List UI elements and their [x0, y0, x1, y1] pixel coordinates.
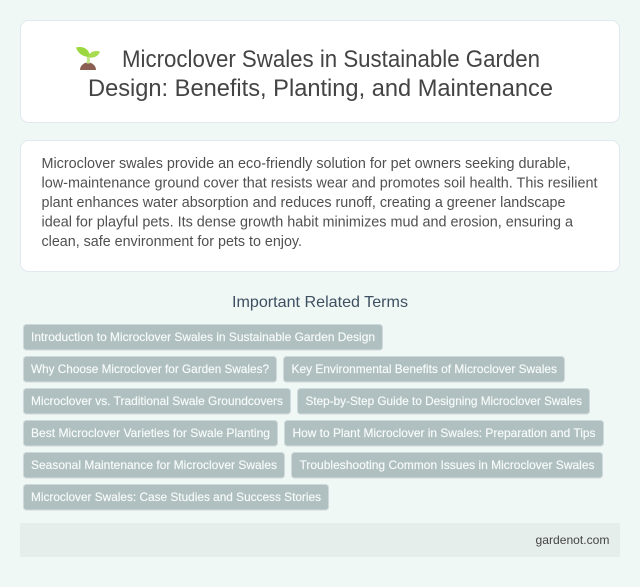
- tag 9: Troubleshooting Common Issues in Microclover Swales: [300, 458, 594, 472]
- footer bar: [20, 523, 620, 557]
- tag 1: [24, 324, 382, 350]
- description text: clean, safe environment for pets to enjoy.: [42, 234, 302, 250]
- tag 6: [24, 420, 278, 446]
- tag list: [24, 324, 604, 510]
- description text: [42, 156, 598, 250]
- tag 5: [298, 388, 590, 414]
- heading: important related terms: Important Related Terms: [232, 294, 408, 311]
- tag 2: Why Choose Microclover for Garden Swales?: [31, 362, 269, 376]
- title text: Design: Benefits, Planting, and Maintenance: [88, 75, 553, 102]
- tag 5: Step-by-Step Guide to Designing Microclover Swales: [306, 394, 582, 408]
- tag 2: [24, 356, 276, 382]
- title text: Microclover Swales in Sustainable Garden: [122, 46, 540, 73]
- description text: ideal for playful pets. Its dense growth habit minimizes mud and erosion, ensuring a: [42, 214, 574, 230]
- tag 4: [24, 388, 290, 414]
- icon: seedling: [76, 47, 100, 70]
- tag 1: Introduction to Microclover Swales in Sustainable Garden Design: [31, 330, 375, 344]
- tag 8: [24, 452, 284, 478]
- tag 7: How to Plant Microclover in Swales: Preparation and Tips: [292, 426, 596, 440]
- tag 3: [284, 356, 564, 382]
- tag 6: Best Microclover Varieties for Swale Planting: [31, 426, 270, 440]
- description text: Microclover swales provide an eco-friendly solution for pet owners seeking durable,: [42, 156, 570, 172]
- tag 10: Microclover Swales: Case Studies and Success Stories: [31, 490, 321, 504]
- tag 10: [24, 484, 328, 510]
- tag 4: Microclover vs. Traditional Swale Groundcovers: [31, 394, 283, 408]
- panel: title card: [20, 20, 620, 122]
- title text: [88, 46, 553, 102]
- footer source text: gardenot.com: [536, 533, 610, 547]
- tag 9: [292, 452, 602, 478]
- description text: low-maintenance ground cover that resists wear and promotes soil health. This resilient: [42, 176, 598, 192]
- panel: description card: [20, 140, 620, 272]
- description text: plant enhances water absorption and reduces runoff, creating a greener landscape: [42, 195, 566, 211]
- tag 8: Seasonal Maintenance for Microclover Swales: [31, 458, 277, 472]
- tag 3: Key Environmental Benefits of Microclover Swales: [292, 362, 557, 376]
- tag 7: [284, 420, 604, 446]
